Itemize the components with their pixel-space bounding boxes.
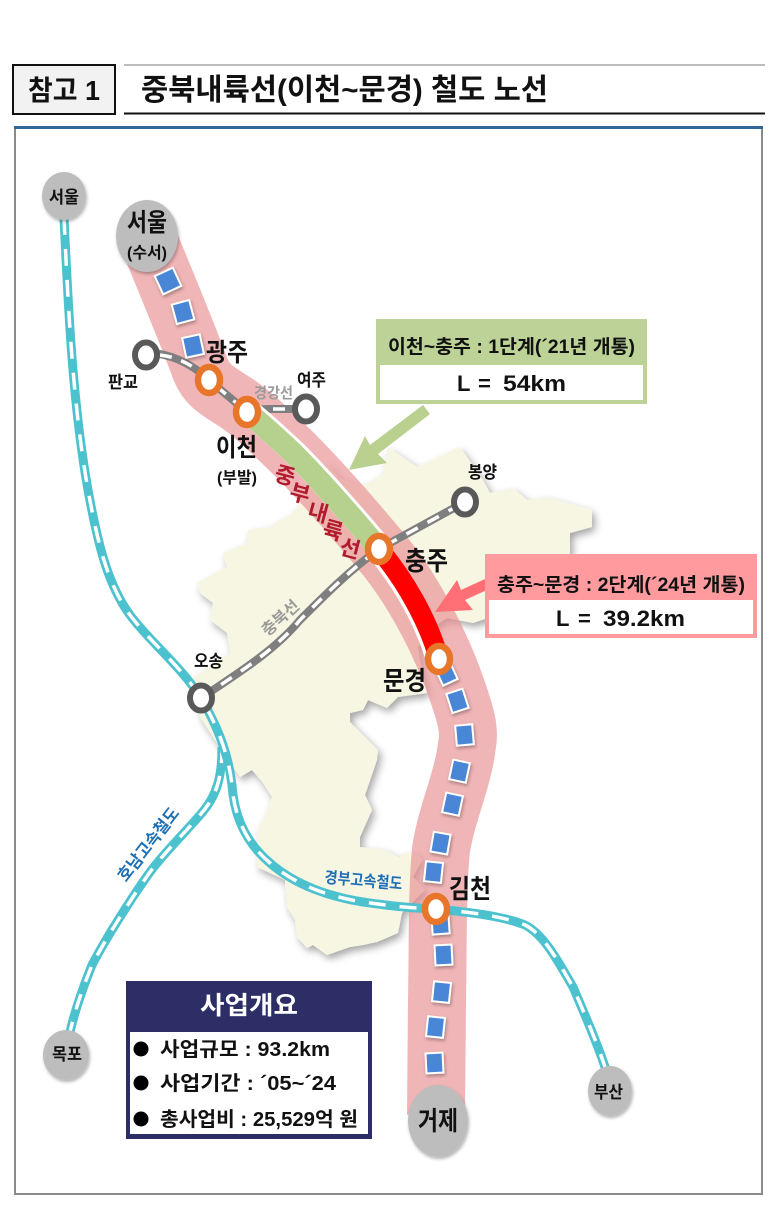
map labels: station names: 여주 [297, 371, 326, 390]
map labels: station names: 거제 [418, 1106, 458, 1136]
callout: phase 2: 39.2km [603, 606, 685, 631]
map label: Jungbu inland line: 중 [272, 461, 298, 490]
map labels: station names: 오송 [194, 652, 223, 671]
map labels: station names [49, 188, 623, 1136]
segment: phase 1 green [247, 411, 380, 549]
heading: reference tag: 참고 1 [28, 75, 100, 106]
heading: title: 중북내륙선(이천~문경) 철도 노선 [141, 74, 548, 107]
callout: phase 2: 충주~문경 : 2단계(´24년 개통) [497, 574, 745, 596]
map label: Chungbuk line: 충북선 [258, 597, 303, 640]
map labels: station names: 부산 [594, 1083, 623, 1102]
overview heading: 사업개요 [200, 992, 298, 1020]
callout: phase 2 [485, 554, 757, 638]
map: Jungbu inland line band [147, 236, 468, 1115]
map labels: station names: 경강선 [254, 385, 293, 402]
map label: Jungbu inland line [272, 461, 363, 563]
terminals: grey city circles [42, 172, 632, 1157]
track: planned section squares [155, 268, 474, 1073]
callout: phase 1 [376, 319, 647, 404]
overview item: cost: 총사업비 : 25,529억 원 [160, 1108, 358, 1131]
callout: phase 2: L [556, 606, 569, 631]
callout: phase 1: 이천~충주 : 1단계(´21년 개통) [388, 336, 635, 358]
overview item: scale: 사업규모 : 93.2km [160, 1038, 330, 1061]
callout: phase 1: 54km [503, 371, 566, 396]
arrow: to phase 1 [349, 405, 430, 470]
map labels: station names: 이천 [216, 434, 257, 462]
map labels: station names: 서울 [127, 209, 167, 237]
line: Honam high-speed rail [70, 747, 222, 1032]
map labels: station names: 서울 [49, 188, 79, 207]
line: Gyeongbu high-speed rail [64, 218, 606, 1070]
map: land region [193, 447, 592, 955]
callout: phase 1: = [478, 371, 491, 396]
overview item: period: 사업기간 : ´05~´24 [160, 1072, 337, 1095]
panel: project overview [126, 981, 372, 1139]
map labels: station names: (부발) [217, 469, 257, 487]
callout: phase 2: = [578, 606, 591, 631]
callout: phase 1: L [457, 371, 470, 396]
stations: orange main stops [198, 367, 450, 922]
map label: Jungbu inland line: 부 [287, 479, 313, 508]
stations: junction rings [135, 342, 476, 710]
map labels: station names: 김천 [449, 874, 491, 904]
map label: Jungbu inland line: 선 [337, 534, 363, 563]
map labels: station names: (수서) [127, 244, 167, 262]
map label: Gyeongbu high-speed rail: 경부고속철도 [324, 869, 403, 893]
map label: Jungbu inland line: 내 [305, 498, 331, 527]
map labels: station names: 광주 [206, 339, 248, 367]
map labels: station names: 봉양 [468, 463, 497, 482]
heading: reference tag [13, 65, 115, 114]
map labels: station names: 판교 [108, 373, 138, 392]
map label: Honam high-speed rail: 호남고속철도 [114, 804, 183, 885]
segment: phase 2 red [378, 549, 439, 660]
map labels: station names: 충주 [405, 546, 448, 576]
arrow: to phase 2 [435, 579, 489, 612]
map labels: station names: 목포 [52, 1045, 82, 1064]
line: Chungbuk line [201, 502, 465, 698]
map label: Jungbu inland line: 륙 [320, 516, 346, 545]
line: Gyeonggang line [146, 352, 306, 412]
map labels: station names: 문경 [383, 666, 426, 696]
